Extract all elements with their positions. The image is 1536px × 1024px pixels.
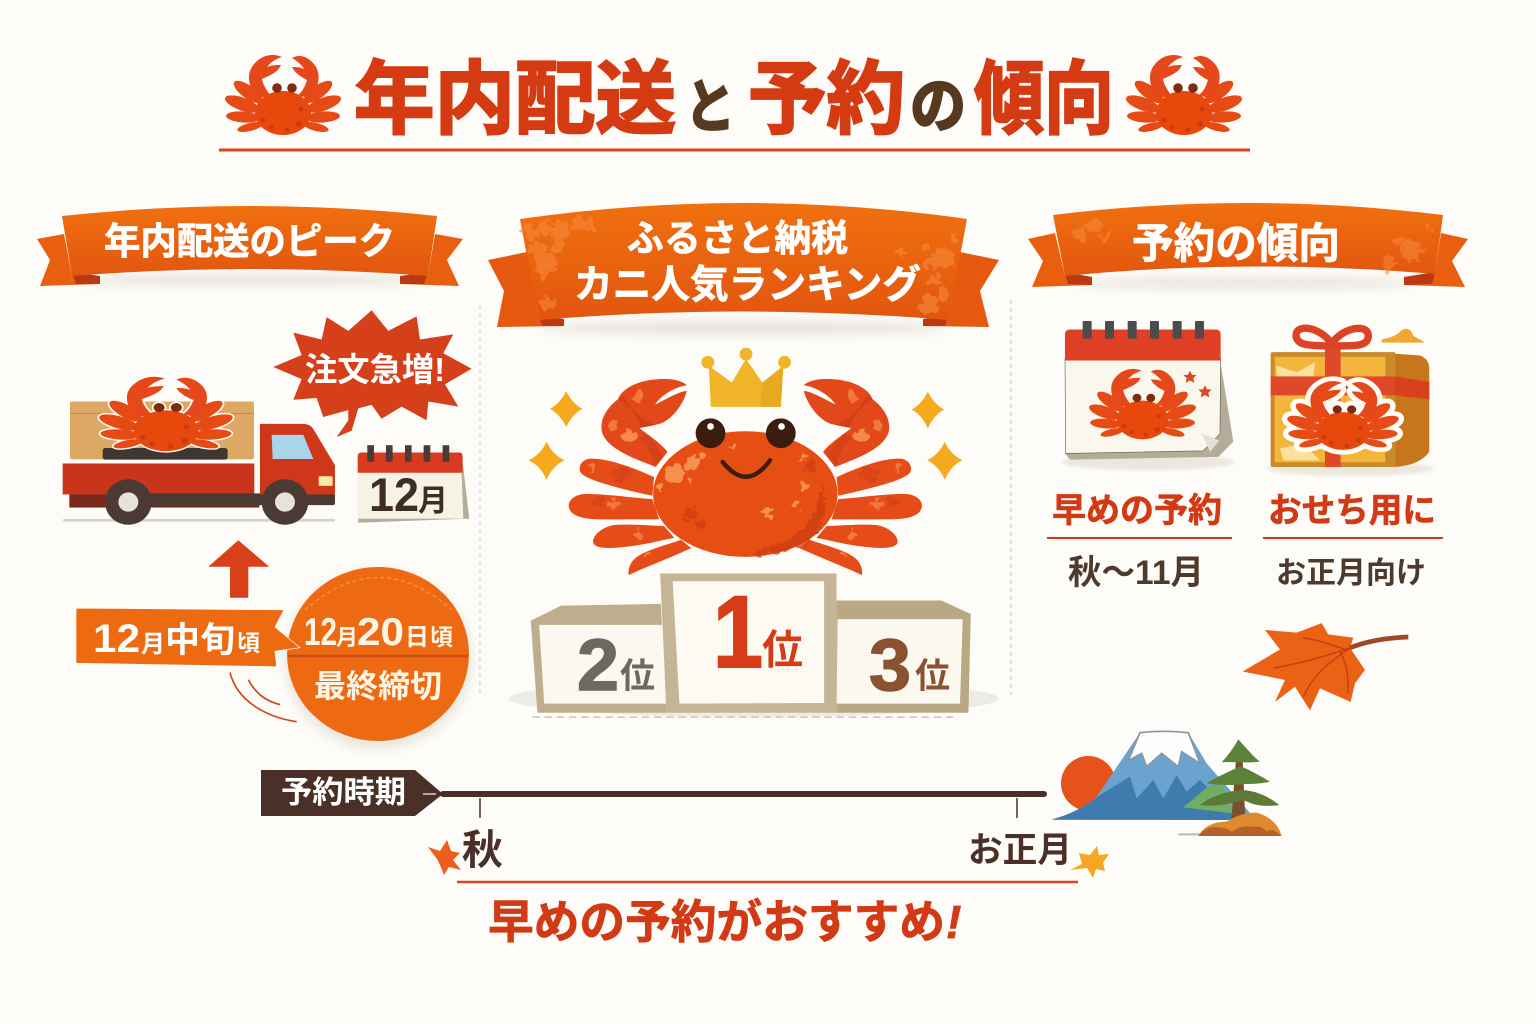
text: for osechi: [1263, 492, 1443, 590]
title text: 傾向: [974, 55, 1114, 144]
label: mid December ribbon: 12: [93, 617, 140, 661]
icon: December calendar: 12: [369, 468, 419, 521]
label: new year with leaf: お正月: [968, 831, 1072, 870]
callout: final deadline circle: 20: [357, 611, 404, 654]
text: for osechi: おせち用に: [1268, 492, 1436, 530]
label: reservation period tag: [261, 770, 443, 816]
title text: の: [910, 73, 966, 140]
title text: 予約: [748, 55, 905, 144]
text: for osechi: お正月向け: [1276, 557, 1426, 590]
arrow: up to peak: [208, 540, 269, 598]
label: autumn with leaf: [428, 827, 503, 875]
icon: title crab left: [223, 55, 343, 135]
rank 1: 1: [713, 575, 763, 689]
rank 1: [713, 575, 803, 689]
label: reservation period tag: 予約時期: [281, 775, 406, 810]
podium: [509, 573, 999, 717]
timeline: reservation period: [261, 731, 1282, 948]
text: early reservation: [1047, 492, 1232, 592]
icon: autumn leaf: [1243, 623, 1408, 710]
callout: final deadline circle: [284, 567, 472, 750]
callout: orders surge burst: 注文急増!: [305, 351, 445, 388]
callout: final deadline circle: 最終締切: [314, 668, 442, 704]
rank 3: 3: [869, 625, 911, 706]
panel: furusato nozei crab ranking: [488, 203, 999, 717]
callout: orders surge burst: [273, 310, 472, 437]
rank 2: 2: [577, 625, 619, 706]
banner: left heading: [37, 206, 463, 286]
icon: calendar with crab: [1062, 321, 1235, 470]
callout: final deadline circle: 日: [405, 624, 429, 651]
panel: year-end delivery peak: [37, 206, 472, 750]
rank 3: 位: [915, 657, 950, 696]
text: early reservation recommended: !: [946, 896, 961, 948]
callout: final deadline circle: 頃: [430, 624, 453, 650]
title: [223, 55, 1244, 144]
icon: gift box with crab: [1267, 328, 1433, 476]
banner: left heading: 年内配送のピーク: [104, 221, 395, 262]
icon: delivery truck with crab: [63, 377, 335, 525]
banner: center heading: ふるさと納税: [627, 218, 848, 259]
icon: speed swooshes: [230, 673, 297, 722]
rank 2: 位: [620, 657, 655, 696]
callout: final deadline circle: 12: [304, 611, 337, 654]
icon: sparkles: [529, 391, 962, 480]
panel: reservation trends: [1028, 203, 1468, 710]
callout: final deadline circle: 月: [336, 625, 358, 650]
banner: right heading: [1028, 203, 1468, 289]
label: autumn with leaf: 秋: [462, 827, 503, 873]
text: early reservation: 早めの予約: [1052, 492, 1222, 530]
icon: December calendar: [358, 445, 469, 523]
icon: title crab right: [1124, 55, 1244, 135]
icon: big crab mascot: [569, 379, 922, 575]
title text: [354, 55, 1114, 144]
icon: gold crown: [701, 348, 791, 407]
label: mid December ribbon: 中旬: [165, 621, 235, 660]
label: mid December ribbon: 頃: [237, 630, 260, 656]
banner: center heading: [488, 203, 999, 335]
title text: 年内配送: [354, 55, 676, 144]
banner: center heading: カニ人気ランキング: [574, 264, 921, 307]
text: early reservation recommended: 早めの予約がおすすめ: [488, 896, 945, 948]
rank 2: [577, 625, 655, 706]
label: mid December ribbon: [76, 608, 300, 667]
icon: Mt. Fuji with sun and pine: [1052, 731, 1282, 836]
rank 1: 位: [762, 627, 803, 673]
label: mid December ribbon: 月: [141, 631, 165, 658]
icon: December calendar: 月: [418, 485, 448, 518]
rank 3: [869, 625, 950, 706]
banner: right heading: 予約の傾向: [1132, 220, 1340, 267]
title text: と: [685, 75, 735, 140]
text: early reservation: 秋〜11月: [1068, 554, 1204, 592]
label: new year with leaf: [968, 831, 1109, 878]
